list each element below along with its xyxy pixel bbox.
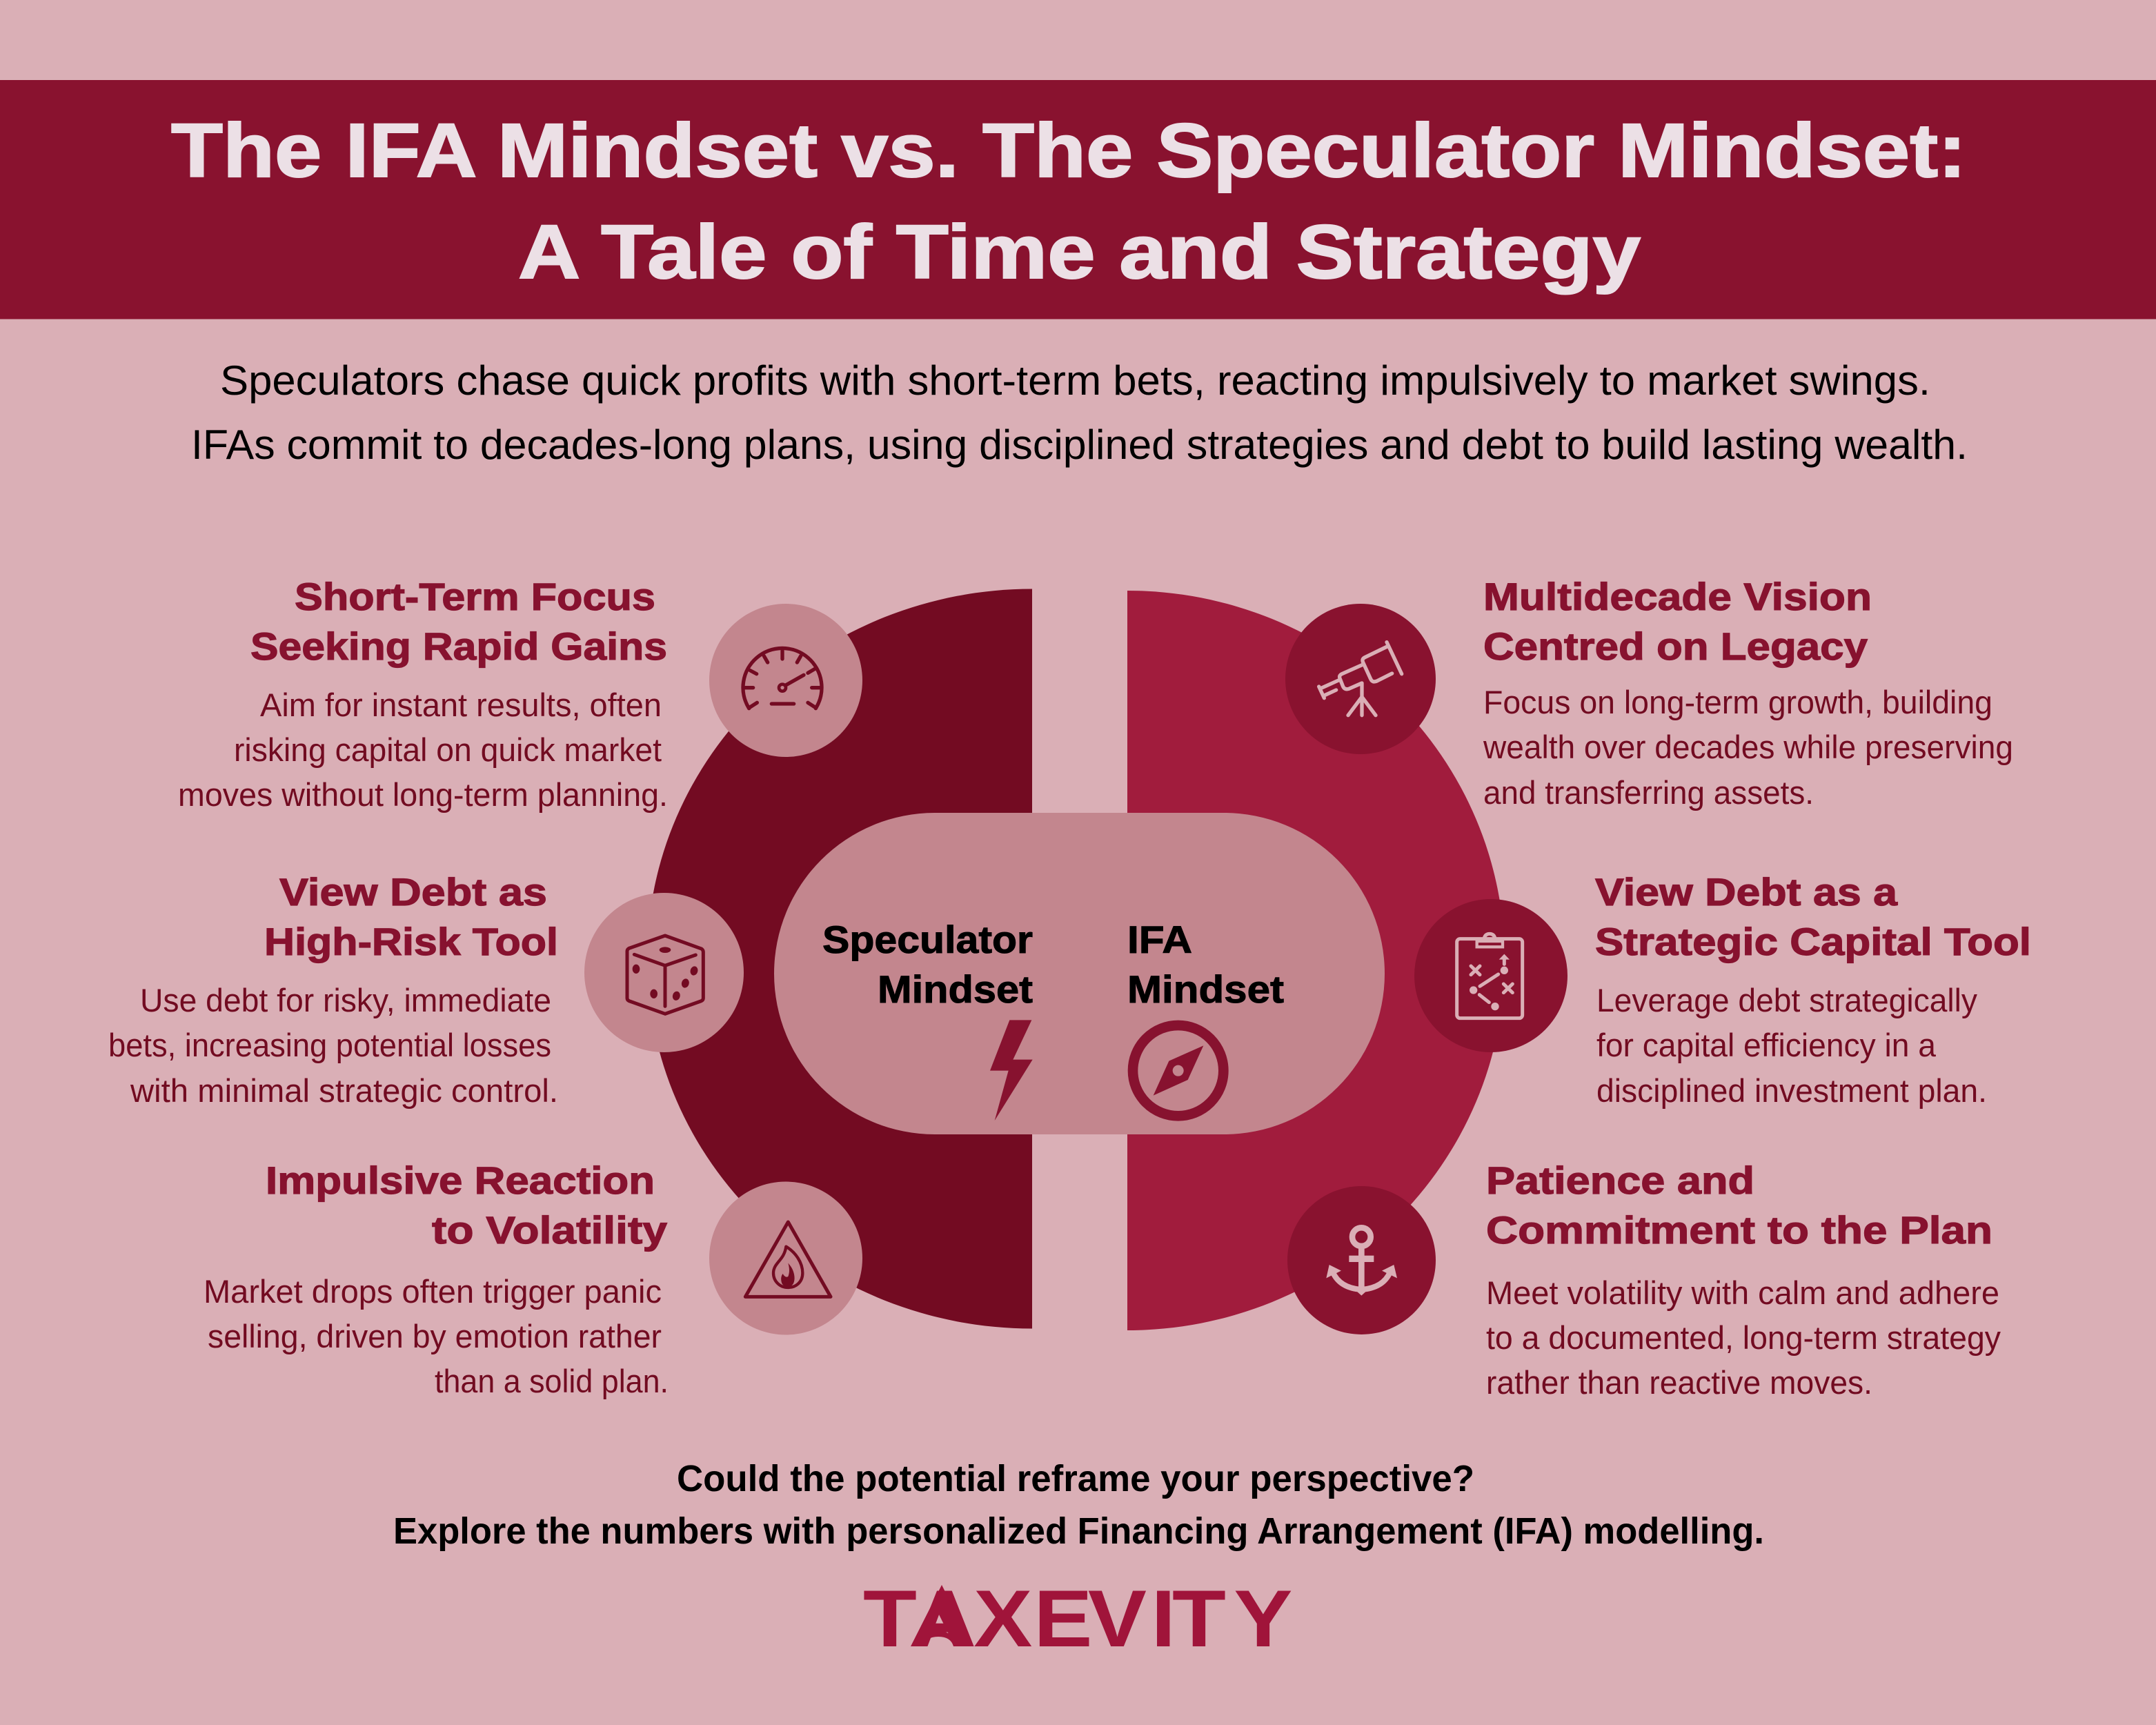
logo: Taxevity: TAXEVITY	[863, 1573, 1292, 1664]
body text: multidecade vision: wealth over decades while preserving	[1483, 729, 2013, 765]
center pill	[774, 813, 1385, 1134]
heading: impulsive reaction: Impulsive Reaction	[266, 1159, 655, 1202]
heading: patience and commitment: Commitment to the Plan	[1486, 1208, 1992, 1252]
closing call to action: Explore the numbers with personalized Financing Arrangement (IFA) modelling.	[393, 1510, 1764, 1552]
panel: short-term focus	[178, 575, 668, 813]
heading: short-term focus: Seeking Rapid Gains	[250, 624, 667, 668]
center label: IFA Mindset: IFA	[1127, 918, 1192, 961]
heading: strategic capital tool: Strategic Capital Tool	[1595, 920, 2031, 963]
heading: high-risk tool	[264, 870, 558, 963]
icon: clipboard strategy in circle	[1414, 899, 1567, 1052]
center label: Speculator Mindset: Mindset	[878, 967, 1033, 1011]
panel: multidecade vision	[1483, 575, 2013, 811]
body text: strategic capital tool: for capital efficiency in a	[1596, 1027, 1937, 1063]
body text: impulsive reaction: selling, driven by emotion rather	[208, 1318, 662, 1354]
body text: patience and commitment: rather than reactive moves.	[1486, 1364, 1872, 1401]
heading: multidecade vision	[1483, 575, 1872, 668]
body text: high-risk tool: bets, increasing potential losses	[108, 1027, 551, 1063]
body text: patience and commitment: Meet volatility with calm and adhere	[1486, 1274, 1999, 1311]
heading: patience and commitment	[1486, 1159, 1992, 1252]
title banner: A Tale of Time and Strategy	[518, 210, 1641, 295]
body text: high-risk tool: with minimal strategic control.	[130, 1072, 558, 1109]
heading: strategic capital tool: View Debt as a	[1595, 870, 1898, 914]
heading: impulsive reaction	[266, 1159, 667, 1252]
intro text	[191, 357, 1968, 468]
body text: strategic capital tool: Leverage debt strategically	[1596, 982, 1977, 1018]
icon: compass	[1133, 1025, 1223, 1116]
closing call to action	[393, 1458, 1764, 1552]
body text: multidecade vision	[1483, 684, 2013, 811]
body text: strategic capital tool	[1596, 982, 1987, 1109]
panel: patience and commitment	[1486, 1159, 2001, 1401]
heading: short-term focus	[250, 575, 667, 668]
body text: high-risk tool	[108, 982, 558, 1109]
body text: patience and commitment	[1486, 1274, 2001, 1401]
panel: debt as high-risk tool	[108, 870, 558, 1109]
right half circle: IFA	[1127, 591, 1505, 1330]
icon: anchor in circle	[1287, 1186, 1436, 1334]
heading: short-term focus: Short-Term Focus	[295, 575, 655, 618]
heading: high-risk tool: View Debt as	[279, 870, 547, 914]
body text: strategic capital tool: disciplined investment plan.	[1596, 1072, 1987, 1109]
body text: short-term focus: moves without long-term planning.	[178, 776, 668, 813]
left half circle: speculator	[647, 589, 1032, 1329]
body text: impulsive reaction	[204, 1273, 669, 1399]
center label: Speculator Mindset: Speculator	[822, 918, 1033, 961]
center label: IFA Mindset: Mindset	[1127, 967, 1284, 1011]
icon: dice in circle	[584, 893, 744, 1052]
heading: impulsive reaction: to Volatility	[432, 1208, 667, 1252]
title banner	[0, 80, 2156, 319]
body text: impulsive reaction: than a solid plan.	[435, 1363, 669, 1399]
body text: patience and commitment: to a documented, long-term strategy	[1486, 1319, 2001, 1356]
icon: speedometer in circle	[709, 604, 862, 757]
body text: multidecade vision: Focus on long-term growth, building	[1483, 684, 1992, 720]
closing call to action: Could the potential reframe your perspective?	[677, 1458, 1474, 1499]
panel: impulsive reaction	[204, 1159, 669, 1399]
heading: high-risk tool: High-Risk Tool	[264, 920, 558, 963]
icon: flame warning in circle	[709, 1181, 862, 1334]
center label: IFA Mindset	[1127, 918, 1284, 1011]
heading: strategic capital tool	[1595, 870, 2031, 963]
body text: short-term focus: risking capital on quick market	[234, 731, 662, 768]
heading: multidecade vision: Multidecade Vision	[1483, 575, 1872, 618]
intro text: IFAs commit to decades-long plans, using disciplined strategies and debt to build lasting wealth.	[191, 422, 1968, 468]
title banner: The IFA Mindset vs. The Speculator Mindset:	[171, 108, 1966, 193]
body text: short-term focus: Aim for instant results, often	[260, 687, 662, 723]
body text: short-term focus	[178, 687, 668, 813]
heading: multidecade vision: Centred on Legacy	[1483, 624, 1868, 668]
heading: patience and commitment: Patience and	[1486, 1159, 1754, 1202]
body text: multidecade vision: and transferring assets.	[1483, 774, 1814, 811]
body text: impulsive reaction: Market drops often trigger panic	[204, 1273, 662, 1310]
icon: telescope in circle	[1285, 604, 1436, 754]
center label: Speculator Mindset	[822, 918, 1033, 1011]
body text: high-risk tool: Use debt for risky, immediate	[140, 982, 551, 1018]
intro text: Speculators chase quick profits with short-term bets, reacting impulsively to market swings.	[220, 357, 1930, 404]
panel: debt as strategic tool	[1595, 870, 2031, 1109]
icon: lightning bolt	[990, 1020, 1033, 1121]
